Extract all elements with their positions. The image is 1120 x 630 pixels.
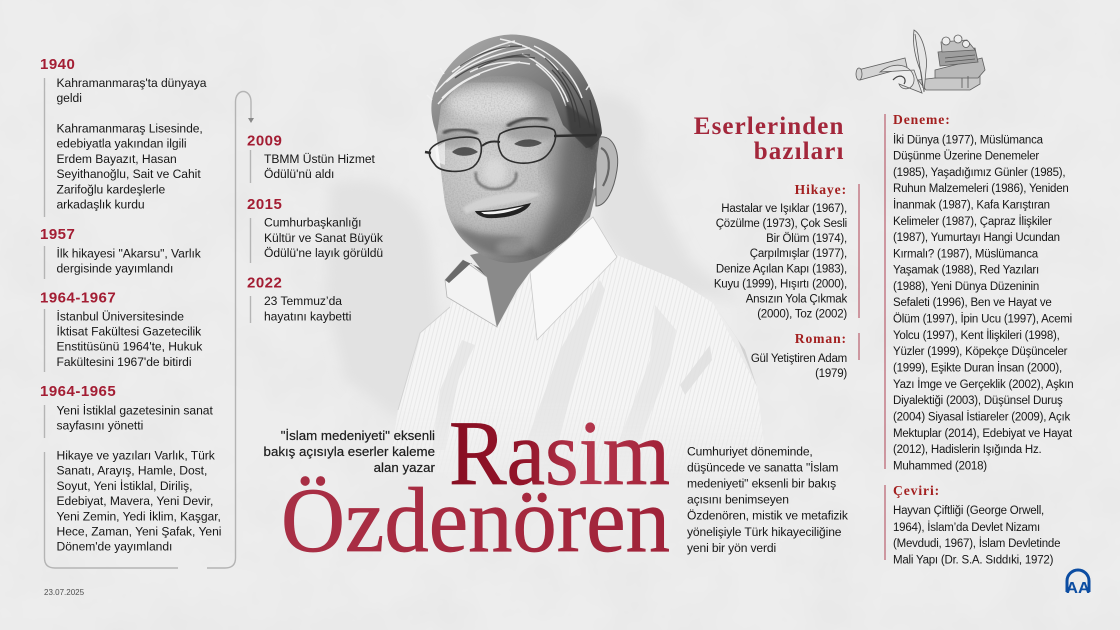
subtitle caption: "İslam medeniyeti" eksenli bbox=[281, 428, 435, 443]
works: Deneme: İnanmak (1987), Kafa Karıştıran bbox=[893, 198, 1050, 212]
works: Deneme: (1987), Yumurtayı Hangi Ucundan bbox=[893, 232, 1060, 244]
1964-1965 entry: Dönem'de yayımlandı bbox=[56, 540, 172, 554]
summary paragraph: Özdenören, mistik ve metafizik bbox=[687, 508, 849, 522]
mouth bbox=[475, 203, 531, 218]
1940 entry: Zarifoğlu kardeşlerle bbox=[56, 182, 166, 196]
shirt bbox=[396, 216, 760, 423]
works: Çeviri: (Mevdudi, 1967), İslam Devletinde bbox=[893, 537, 1060, 550]
1940 entry: 1940 bbox=[40, 56, 75, 73]
2022 entry bbox=[247, 274, 351, 324]
main title bbox=[281, 402, 670, 571]
1940 entry: Seyithanoğlu, Sait ve Cahit bbox=[56, 167, 201, 181]
2009 entry: 2009 bbox=[247, 132, 282, 150]
works: Roman: Gül Yetiştiren Adam bbox=[751, 353, 847, 365]
timeline connector and bars bbox=[44, 78, 254, 568]
2015 entry: Cumhurbaşkanlığı bbox=[264, 216, 362, 230]
1957 entry bbox=[40, 226, 202, 276]
works: Deneme: Mektuplar (2014), Edebiyat ve Hayat bbox=[893, 428, 1073, 440]
moustache bbox=[463, 192, 540, 214]
1964-1967 entry: Enstitüsünü 1964'te, Hukuk bbox=[56, 340, 203, 354]
neck bbox=[470, 185, 598, 327]
1964-1965 entry: Hikaye ve yazıları Varlık, Türk bbox=[56, 448, 216, 462]
works: Deneme: (1985), Yaşadığımız Günler (1985), bbox=[893, 167, 1065, 179]
2009 entry: TBMM Üstün Hizmet bbox=[264, 152, 376, 166]
works: Çeviri: Mali Yapı (Dr. S.A. Sıddıki, 1972) bbox=[893, 554, 1054, 566]
heading: Eserlerinden bazıları bbox=[694, 113, 844, 165]
works: Deneme: İki Dünya (1977), Müslümanca bbox=[893, 134, 1044, 146]
1940 entry: arkadaşlık kurdu bbox=[56, 198, 145, 212]
face bbox=[435, 66, 600, 263]
works: Roman bbox=[751, 331, 859, 380]
works: Deneme: Ruhun Malzemeleri (1986), Yeniden bbox=[893, 183, 1069, 195]
works: Roman: Roman: bbox=[795, 331, 847, 346]
summary paragraph: medeniyeti" eksenli bir bakış bbox=[687, 476, 836, 490]
heading: Eserlerinden bazıları: Eserlerinden bbox=[694, 113, 844, 140]
timeline second column bbox=[247, 132, 384, 324]
works: Deneme: Yazı İmge ve Gerçeklik (2002), Aşkın bbox=[893, 378, 1073, 391]
1964-1965 entry: Yeni İstiklal gazetesinin sanat bbox=[56, 404, 213, 418]
summary paragraph: yönelişiyle Türk hikayeciliğine bbox=[687, 525, 842, 539]
works: Deneme: Yaşamak (1988), Red Yazıları bbox=[893, 264, 1039, 276]
works: Hikaye: Ansızın Yola Çıkmak bbox=[746, 294, 847, 306]
1964-1967 entry: Fakültesini 1967'de bitirdi bbox=[56, 355, 192, 369]
1964-1965 entry bbox=[40, 383, 221, 554]
works: Deneme: Muhammed (2018) bbox=[893, 460, 987, 472]
works: Hikaye: Bir Ölüm (1974), bbox=[766, 233, 847, 245]
works: Hikaye: Kuyu (1999), Hışırtı (2000), bbox=[714, 278, 847, 290]
1964-1965 entry: Sanatı, Arayış, Hamle, Dost, bbox=[56, 464, 207, 478]
2022 entry: 23 Temmuz’da bbox=[264, 294, 342, 308]
works: Deneme: (1988), Yeni Dünya Düzeninin bbox=[893, 281, 1039, 293]
portrait photo of Rasim Özdenören bbox=[396, 34, 760, 423]
1964-1965 entry: Edebiyat, Mavera, Yeni Devir, bbox=[56, 494, 213, 508]
works: Deneme: Deneme: bbox=[893, 112, 951, 127]
eyes bbox=[452, 147, 478, 156]
icon: AA logo: AA bbox=[1066, 580, 1090, 597]
works: Deneme: (2004) Siyasal İstiareler (2009), Açık bbox=[893, 410, 1070, 424]
works: Deneme: Sefaleti (1996), Ben ve Hayat ve bbox=[893, 297, 1052, 309]
glasses bbox=[425, 127, 597, 171]
main title: Rasim bbox=[449, 402, 670, 504]
1940 entry bbox=[40, 56, 207, 212]
2015 entry: 2015 bbox=[247, 196, 282, 213]
works: Deneme: Kırmalı? (1987), Müslümanca bbox=[893, 248, 1039, 260]
1964-1965 entry: 1964-1965 bbox=[40, 383, 116, 400]
2022 entry: 2022 bbox=[247, 274, 282, 292]
watercolor stain behind portrait bbox=[325, 93, 740, 420]
ear bbox=[596, 137, 618, 206]
works: Deneme: Diyalektiği (2003), Düşünsel Duruş bbox=[893, 395, 1063, 407]
date: 23.07.2025 bbox=[44, 588, 85, 597]
works: Çeviri: Çeviri: bbox=[893, 483, 940, 498]
face shading bbox=[436, 82, 598, 258]
1964-1967 entry: İstanbul Üniversitesinde bbox=[56, 310, 184, 324]
summary paragraph: Cumhuriyet döneminde, bbox=[687, 444, 813, 458]
works: Deneme: (2012), Hadislerin Işığında Hz. bbox=[893, 444, 1042, 456]
works: Hikaye: Denize Açılan Kapı (1983), bbox=[716, 264, 847, 276]
1940 entry: Kahramanmaraş'ta dünyaya bbox=[56, 76, 207, 90]
subtitle caption bbox=[264, 428, 436, 475]
summary paragraph: açısını benimseyen bbox=[687, 492, 789, 506]
works: Hikaye: Çözülme (1973), Çok Sesli bbox=[716, 218, 847, 230]
timeline left column bbox=[40, 56, 221, 554]
eyebrows bbox=[443, 129, 478, 134]
2009 entry bbox=[247, 132, 376, 181]
works: Hikaye: Çarpılmışlar (1977), bbox=[750, 248, 847, 260]
summary paragraph: yeni bir yön verdi bbox=[687, 541, 776, 555]
hair bbox=[431, 35, 602, 148]
works: Çeviri: 1964), İslam’da Devlet Nizamı bbox=[893, 521, 1040, 534]
1940 entry: geldi bbox=[56, 91, 82, 105]
works: Deneme: Yolcu (1997), Kent İlişkileri (1998), bbox=[893, 329, 1060, 342]
summary paragraph: düşüncede ve sanatta "İslam bbox=[687, 460, 838, 474]
works: Çeviri bbox=[885, 483, 1060, 566]
works: Deneme: Ölüm (1997), İpin Ucu (1997), Acemi bbox=[893, 312, 1072, 326]
icon: books, scroll and quill bbox=[856, 30, 985, 93]
subtitle caption: bakış açısıyla eserler kaleme bbox=[264, 444, 435, 459]
works: Hikaye bbox=[714, 182, 859, 320]
main title: Özdenören bbox=[281, 469, 670, 571]
2022 entry: hayatını kaybetti bbox=[264, 310, 351, 324]
1964-1965 entry: Yeni Zemin, Yedi İklim, Kaşgar, bbox=[56, 510, 221, 524]
works: Deneme: (1999), Eşikte Duran İnsan (2000), bbox=[893, 362, 1062, 374]
works: Hikaye: Hastalar ve Işıklar (1967), bbox=[721, 203, 847, 215]
works: Deneme bbox=[885, 112, 1073, 472]
summary paragraph bbox=[687, 444, 849, 555]
nose bbox=[484, 159, 506, 185]
works: Hikaye: (2000), Toz (2002) bbox=[757, 308, 847, 320]
1964-1965 entry: sayfasını yönetti bbox=[56, 418, 143, 432]
1957 entry: İlk hikayesi "Akarsu", Varlık bbox=[56, 246, 202, 260]
1964-1965 entry: Soyut, Yeni İstiklal, Diriliş, bbox=[56, 479, 192, 493]
2015 entry: Ödülü'ne layık görüldü bbox=[264, 246, 383, 260]
2009 entry: Ödülü'nü aldı bbox=[264, 167, 334, 181]
heading: Eserlerinden bazıları: bazıları bbox=[754, 138, 844, 165]
subtitle caption: alan yazar bbox=[374, 460, 436, 475]
works: Çeviri: Hayvan Çiftliği (George Orwell, bbox=[893, 505, 1044, 517]
2015 entry bbox=[247, 196, 384, 260]
1940 entry: Kahramanmaraş Lisesinde, bbox=[56, 122, 203, 136]
1957 entry: dergisinde yayımlandı bbox=[56, 262, 173, 276]
works: Roman: (1979) bbox=[815, 368, 847, 380]
2015 entry: Kültür ve Sanat Büyük bbox=[264, 231, 384, 245]
works: Deneme: Yüzler (1999), Köpekçe Düşünceler bbox=[893, 346, 1068, 358]
1940 entry: Erdem Bayazıt, Hasan bbox=[56, 152, 177, 166]
works: Deneme: Kelimeler (1987), Çapraz İlişkiler bbox=[893, 215, 1052, 228]
icon: AA logo bbox=[1066, 570, 1090, 597]
works: Deneme: Düşünme Üzerine Denemeler bbox=[893, 150, 1039, 162]
1964-1967 entry: İktisat Fakültesi Gazetecilik bbox=[56, 324, 202, 338]
1964-1967 entry bbox=[40, 290, 203, 369]
1964-1965 entry: Hece, Zaman, Yeni Şafak, Yeni bbox=[56, 524, 221, 538]
works: Hikaye: Hikaye: bbox=[795, 182, 847, 197]
1940 entry: edebiyatla yakından ilgili bbox=[56, 136, 187, 150]
1957 entry: 1957 bbox=[40, 226, 75, 243]
1964-1967 entry: 1964-1967 bbox=[40, 290, 116, 306]
